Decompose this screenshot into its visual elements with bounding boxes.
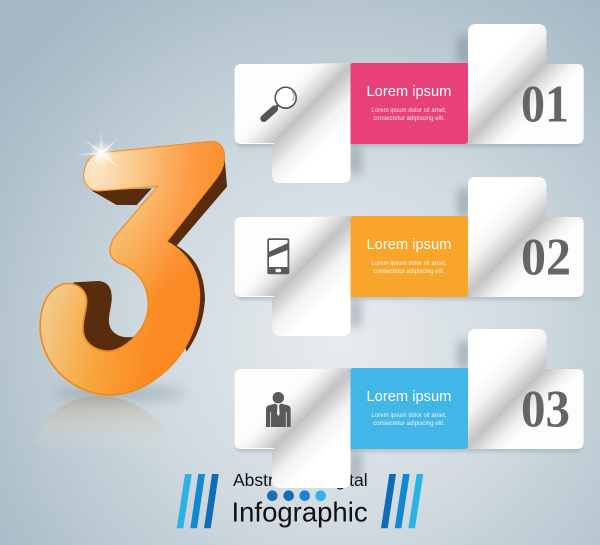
colour panel [350, 368, 468, 449]
right card [468, 64, 584, 144]
ground shadow [53, 385, 187, 401]
bottom left flap [272, 219, 350, 336]
dots [267, 490, 326, 501]
fold shading right [468, 217, 583, 297]
flap shadow bottom [349, 451, 361, 479]
fold shading right [468, 369, 583, 449]
front face [40, 142, 224, 395]
card shadow [236, 219, 582, 300]
fold shading left [236, 216, 350, 296]
row 1 [234, 24, 584, 183]
flap shadow top [458, 189, 470, 217]
right stripes [381, 474, 423, 528]
number: 02 [521, 229, 571, 287]
colour panel [350, 216, 468, 297]
icon: businessman [266, 392, 291, 427]
fold shading right [468, 64, 583, 144]
bottom left flap [272, 371, 350, 488]
heading small: Digital [319, 470, 368, 490]
panel text: Lorem ipsum dolor sit amet, [371, 260, 447, 267]
heading large: Infographic [232, 497, 368, 528]
number: 03 [521, 381, 570, 439]
right card [468, 369, 584, 449]
sparkle [75, 130, 120, 168]
footer title block [177, 470, 423, 528]
icon: magnifier [264, 87, 296, 118]
panel text: consectetur adipiscing elit. [373, 420, 445, 427]
panel title: Lorem ipsum [366, 237, 451, 253]
reflection [33, 396, 175, 455]
top right flap [468, 177, 546, 294]
panel title: Lorem ipsum [366, 84, 451, 100]
icon: phone [267, 238, 289, 274]
number: 01 [521, 76, 569, 134]
panel text: Lorem ipsum dolor sit amet, [371, 107, 447, 114]
bottom left flap [272, 66, 350, 183]
gloss highlight [40, 142, 224, 395]
left card [234, 64, 350, 144]
colour panel [350, 63, 468, 144]
left card [234, 369, 350, 449]
fold shading left [236, 368, 350, 448]
left stripes [177, 474, 219, 528]
flap shadow bottom [349, 299, 361, 327]
fold shading left [236, 63, 350, 143]
top right flap [468, 329, 546, 446]
panel title: Lorem ipsum [366, 389, 451, 405]
heading small: Abstract [233, 470, 297, 490]
panel text: Lorem ipsum dolor sit amet, [371, 412, 447, 419]
card shadow [236, 66, 582, 147]
row 2 [234, 177, 584, 336]
panel text: consectetur adipiscing elit. [373, 115, 445, 122]
flap shadow bottom [349, 146, 361, 174]
top right flap [468, 24, 546, 141]
panel text: consectetur adipiscing elit. [373, 268, 445, 275]
flap shadow top [458, 36, 470, 64]
big 3D number three [33, 130, 227, 455]
right card [468, 217, 584, 297]
extrusion [73, 145, 227, 355]
card shadow [236, 371, 582, 452]
left card [234, 217, 350, 297]
flap shadow top [458, 341, 470, 369]
row 3 [234, 329, 584, 488]
